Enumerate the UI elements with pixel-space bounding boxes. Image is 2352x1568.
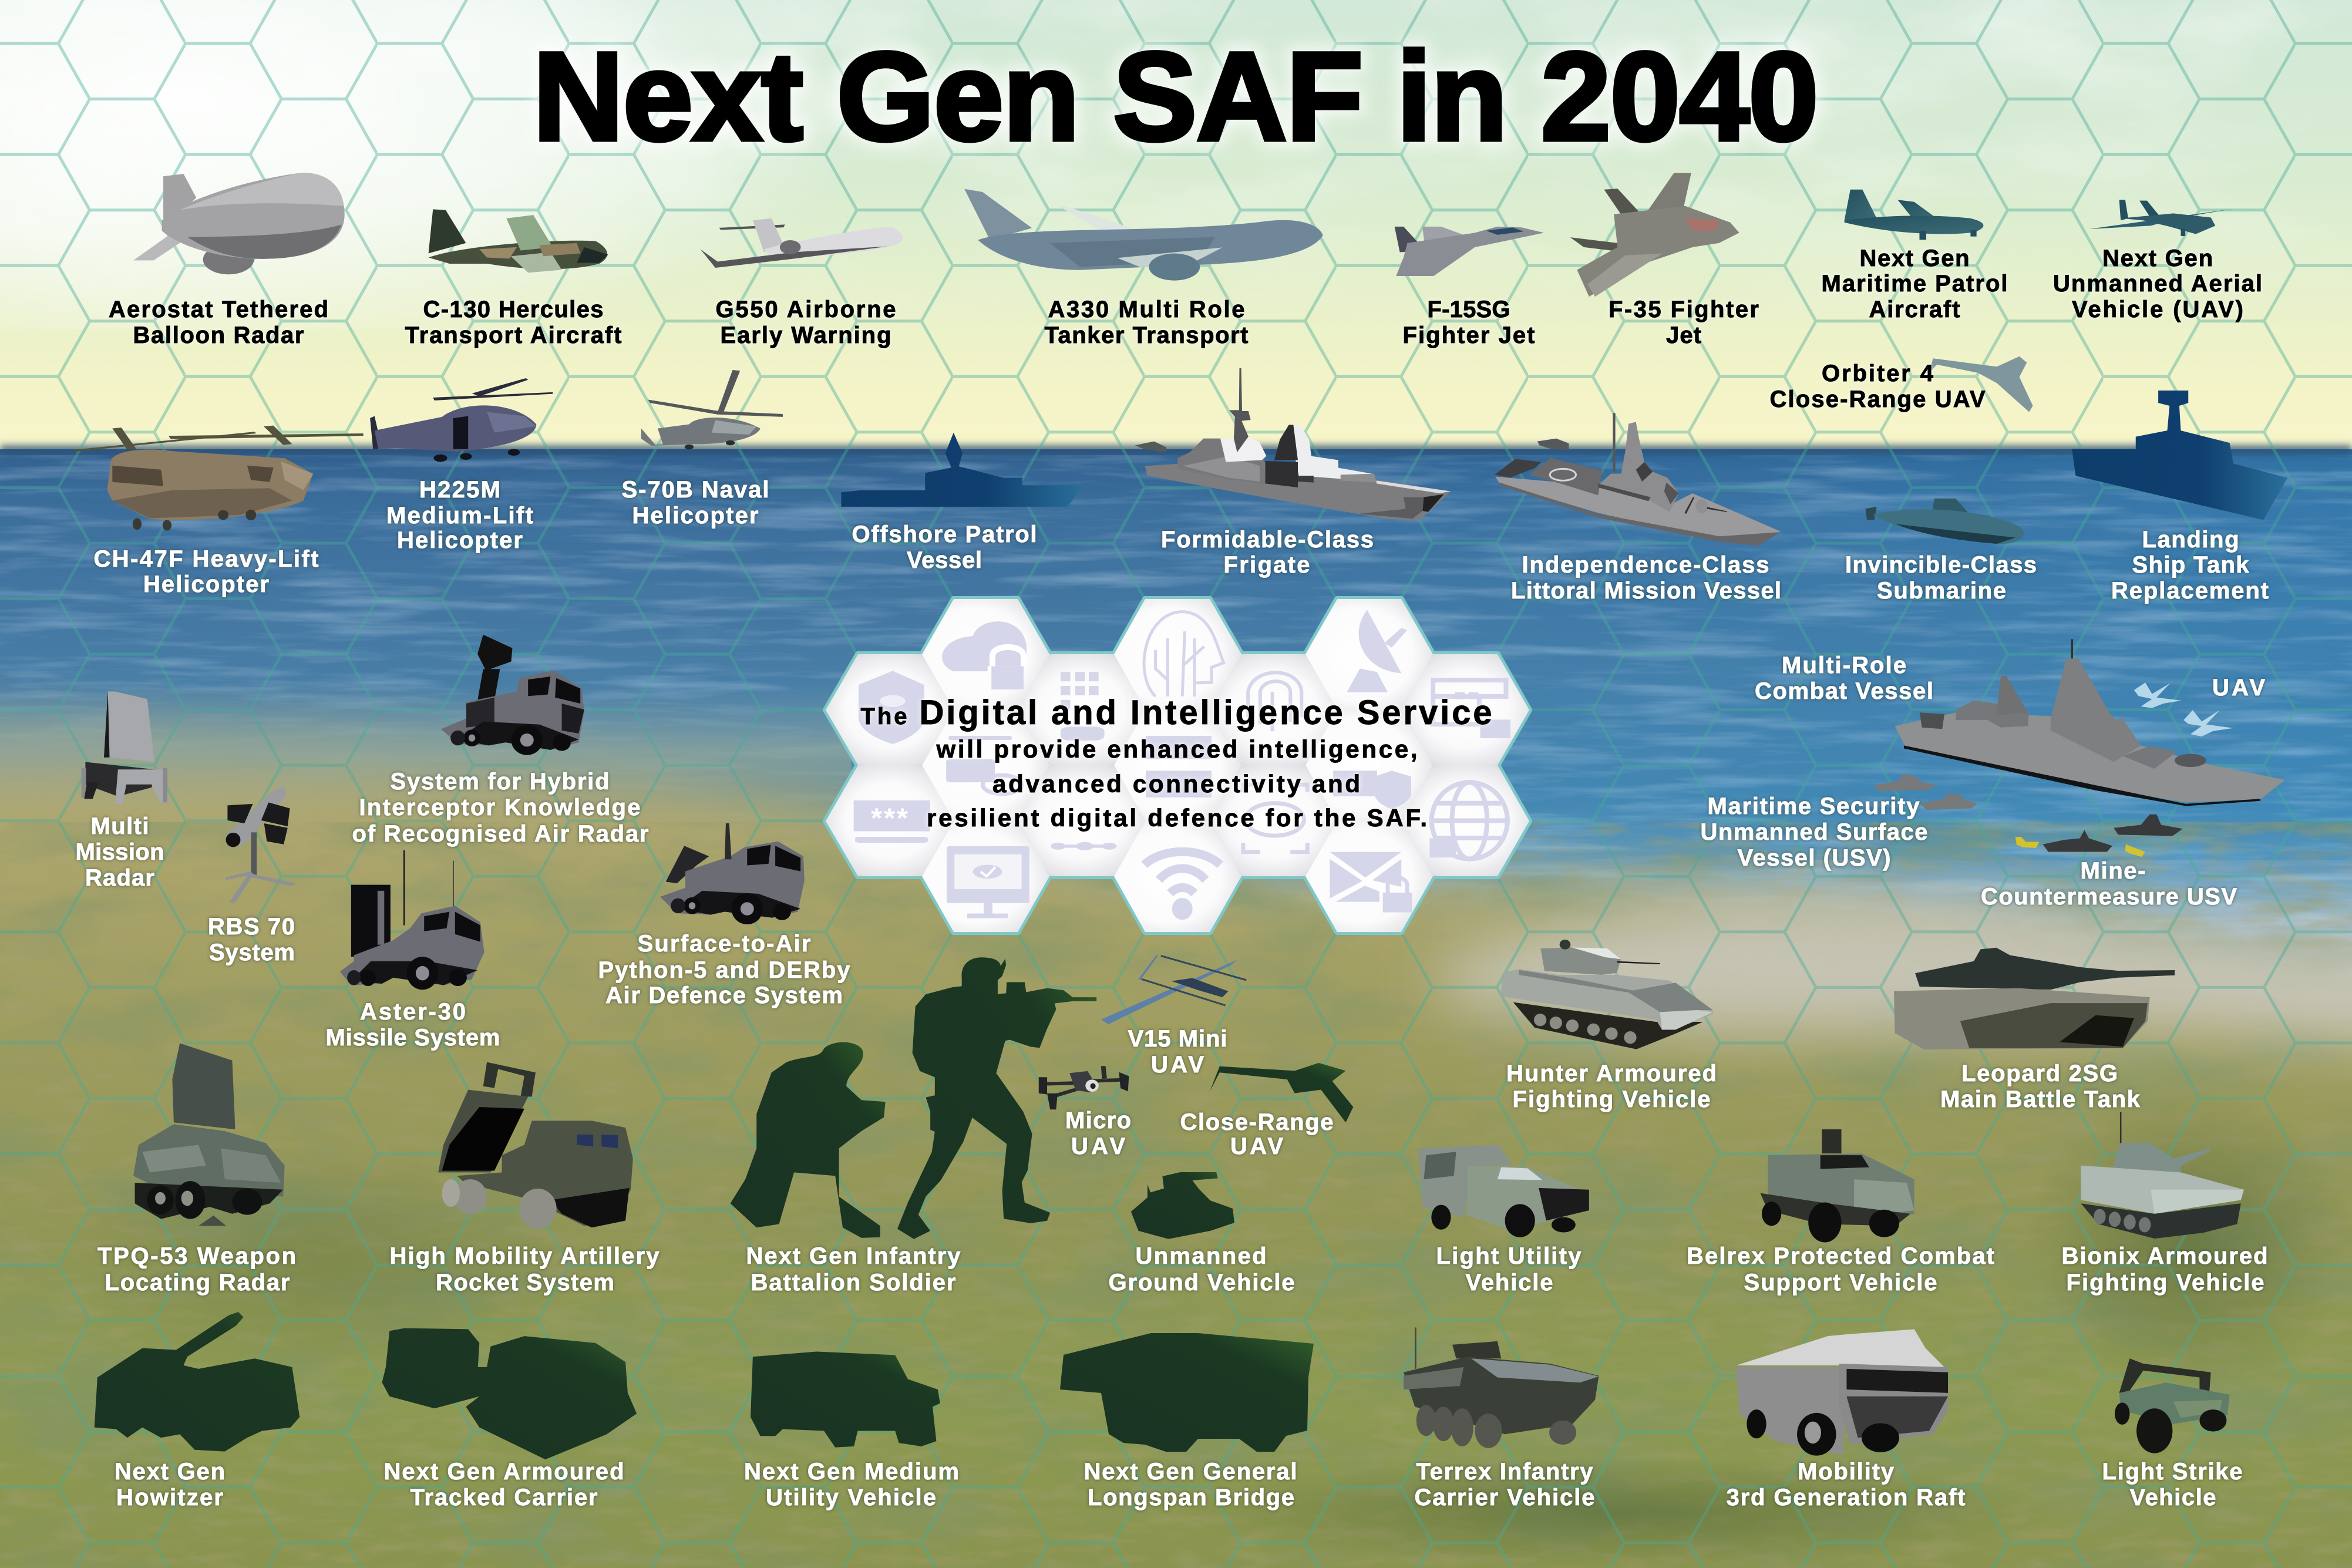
icon: launcher truck bbox=[660, 823, 805, 924]
item: Offshore Patrol Vessel bbox=[841, 433, 1084, 573]
item: Multi-Role Combat Vessel bbox=[1755, 639, 2285, 806]
icon: submarine bbox=[1865, 499, 2024, 544]
label: Landing bbox=[2142, 527, 2239, 553]
label: Vehicle bbox=[1466, 1270, 1553, 1296]
label: Air Defence System bbox=[605, 982, 843, 1008]
item: Multi Mission Radar bbox=[75, 692, 169, 891]
item: CH-47F Heavy-Lift Helicopter bbox=[73, 426, 364, 597]
item: aerostat tethered balloon radar bbox=[109, 173, 345, 348]
icon: password field bbox=[854, 800, 930, 843]
label: Countermeasure USV bbox=[1981, 884, 2237, 910]
icon: howitzer silhouette bbox=[95, 1312, 300, 1452]
icon: H225M bbox=[370, 378, 553, 462]
title: Next Gen SAF in 2040 bbox=[533, 26, 1818, 167]
label: of Recognised Air Radar bbox=[352, 821, 648, 847]
label: Utility Vehicle bbox=[766, 1485, 936, 1510]
label: Close-Range UAV bbox=[1770, 386, 1986, 412]
label bbox=[1687, 1243, 1994, 1296]
icon: keypad and magnifier bbox=[946, 736, 1022, 794]
icon: TPQ-53 radar bbox=[133, 1043, 285, 1226]
label: Offshore Patrol bbox=[852, 521, 1037, 547]
item: Next Gen Maritime Patrol Aircraft bbox=[1822, 190, 2007, 322]
label bbox=[386, 477, 533, 553]
label: Fighting Vehicle bbox=[1513, 1086, 1710, 1112]
icon: combat vessel bbox=[1895, 639, 2285, 806]
label: Transport Aircraft bbox=[405, 322, 621, 348]
title: Next Gen SAF in 2040 bbox=[533, 26, 1818, 167]
panel text: resilient digital defence for the SAF. bbox=[927, 804, 1427, 832]
icon: shield with lock bbox=[859, 671, 924, 744]
label: RBS 70 bbox=[208, 914, 295, 940]
label: Close-Range bbox=[1180, 1109, 1333, 1135]
item: S-70B Naval Helicopter bbox=[621, 370, 783, 529]
item: Mobility 3rd Generation Raft bbox=[1727, 1329, 1965, 1510]
label bbox=[325, 999, 500, 1051]
label: Light Utility bbox=[1436, 1243, 1582, 1269]
panel text: Digital and Intelligence Service bbox=[920, 694, 1492, 732]
icon: UGV silhouette bbox=[1131, 1172, 1234, 1239]
label bbox=[746, 1243, 961, 1296]
label: Submarine bbox=[1877, 578, 2006, 604]
icon: C-130 bbox=[429, 209, 608, 272]
icon: eye scan bbox=[1243, 785, 1307, 852]
item: Unmanned Ground Vehicle bbox=[1109, 1172, 1294, 1296]
hexagon icons bbox=[854, 610, 1510, 918]
label: UAV bbox=[1151, 1052, 1204, 1078]
item: Micro UAV bbox=[1039, 1066, 1131, 1159]
label: Frigate bbox=[1224, 552, 1310, 578]
item: Leopard 2SG Main Battle Tank bbox=[1894, 948, 2175, 1112]
icon: server and gears bbox=[1146, 736, 1212, 798]
label bbox=[1436, 1243, 1582, 1296]
label bbox=[744, 1459, 959, 1510]
label bbox=[109, 297, 328, 348]
label: A330 Multi Role bbox=[1048, 297, 1245, 322]
icon: frigate bbox=[1135, 368, 1451, 521]
label: Light Strike bbox=[2102, 1459, 2242, 1485]
label: Missile System bbox=[325, 1025, 500, 1051]
icon: kneeling soldier bbox=[731, 1042, 886, 1238]
label: Unmanned Aerial bbox=[2053, 271, 2262, 297]
icon: Orbiter 4 bbox=[1929, 356, 2033, 412]
label bbox=[852, 521, 1037, 573]
label: Mission bbox=[75, 839, 164, 865]
item: C-130 Hercules bbox=[405, 209, 621, 348]
label: Python-5 and DERby bbox=[598, 957, 850, 983]
label: Mobility bbox=[1798, 1459, 1895, 1485]
label: Unmanned Surface bbox=[1701, 819, 1927, 845]
label bbox=[2053, 245, 2262, 322]
icon: standing soldier bbox=[897, 957, 1096, 1239]
label: Radar bbox=[85, 865, 154, 891]
label: Terrex Infantry bbox=[1416, 1459, 1593, 1485]
icon: circuit brain head bbox=[1144, 612, 1224, 696]
label: Ground Vehicle bbox=[1109, 1270, 1294, 1296]
icon: soldier silhouettes bbox=[731, 957, 1096, 1239]
item: Landing Ship Tank Replacement bbox=[2072, 391, 2287, 604]
item: RBS 70 System bbox=[208, 786, 295, 965]
icon: cloud with lock bbox=[942, 621, 1027, 689]
icon: radar truck bbox=[441, 635, 584, 755]
icon: aerostat bbox=[133, 173, 345, 274]
label: TPQ-53 Weapon bbox=[97, 1243, 296, 1269]
icon: maritime USVs bbox=[1873, 774, 1977, 810]
label: UAV bbox=[1230, 1133, 1283, 1159]
item: F-35 fighter jet bbox=[1570, 173, 1759, 348]
icon: G550 bbox=[701, 218, 903, 268]
label: Aerostat Tethered bbox=[109, 297, 328, 322]
label: Aster-30 bbox=[360, 999, 466, 1025]
label bbox=[1084, 1459, 1297, 1510]
label: Longspan Bridge bbox=[1088, 1485, 1294, 1510]
item: SHIKRA air radar truck bbox=[352, 635, 648, 847]
icon: F-15SG bbox=[1395, 227, 1544, 276]
icon: Terrex bbox=[1404, 1327, 1599, 1448]
icon: satellite dish bbox=[1347, 610, 1407, 692]
label: Interceptor Knowledge bbox=[359, 795, 640, 820]
icon: multi mission radar bbox=[82, 692, 169, 804]
label: Invincible-Class bbox=[1845, 552, 2037, 578]
label: Bionix Armoured bbox=[2061, 1243, 2268, 1269]
panel text: advanced connectivity and bbox=[992, 770, 1360, 798]
label bbox=[97, 1243, 296, 1296]
label: G550 Airborne bbox=[715, 297, 896, 322]
label bbox=[390, 1243, 659, 1296]
panel text: The bbox=[861, 704, 907, 729]
label: Mine- bbox=[2080, 858, 2146, 884]
label: Aircraft bbox=[1869, 297, 1960, 322]
item: Orbiter 4 Close-Range UAV bbox=[1770, 356, 2033, 412]
label bbox=[1161, 527, 1374, 578]
label bbox=[1109, 1243, 1294, 1296]
label bbox=[1755, 652, 1933, 704]
label: Fighting Vehicle bbox=[2066, 1270, 2264, 1296]
panel: Digital and Intelligence Service hexagon cluster bbox=[826, 599, 1529, 932]
label: Battalion Soldier bbox=[751, 1270, 956, 1296]
label: Tracked Carrier bbox=[410, 1485, 598, 1510]
icon: A330 bbox=[964, 189, 1323, 281]
label: Next Gen bbox=[115, 1459, 225, 1485]
icon: Bionix bbox=[2081, 1112, 2244, 1239]
label: Next Gen Armoured bbox=[384, 1459, 624, 1485]
label: Early Warning bbox=[720, 322, 891, 348]
label bbox=[1770, 361, 1986, 412]
label: Medium-Lift bbox=[386, 503, 533, 529]
label: Next Gen bbox=[1859, 245, 1970, 271]
icon: keypad with hand bbox=[1061, 672, 1105, 741]
item: High Mobility Artillery Rocket System bbox=[390, 1062, 659, 1296]
label: Unmanned bbox=[1136, 1243, 1266, 1269]
label: H225M bbox=[419, 477, 500, 503]
label bbox=[75, 813, 164, 891]
label bbox=[1822, 245, 2007, 322]
item: Next Gen UAV bbox=[2053, 200, 2262, 322]
item: Next Gen Medium Utility Vehicle bbox=[744, 1351, 959, 1510]
label: Helicopter bbox=[397, 527, 523, 553]
icon: light strike vehicle bbox=[2115, 1358, 2230, 1453]
label: Independence-Class bbox=[1522, 552, 1769, 578]
item: Invincible-Class Submarine bbox=[1845, 499, 2037, 604]
icon: unmanned aerial vehicle bbox=[2089, 200, 2233, 236]
icon: Hunter AFV bbox=[1502, 940, 1713, 1049]
label: Next Gen General bbox=[1084, 1459, 1297, 1485]
item: G550 Airborne Early Warning bbox=[701, 218, 903, 348]
label: Ship Tank bbox=[2132, 552, 2249, 578]
label bbox=[1414, 1459, 1595, 1510]
label bbox=[1609, 297, 1759, 348]
item: Light Utility Vehicle bbox=[1419, 1145, 1589, 1296]
hexagon panel background bbox=[826, 599, 1529, 932]
item: Python-5 and DERby launcher bbox=[598, 823, 850, 1008]
icon: password field: *** bbox=[871, 803, 910, 834]
item: Next Gen Howitzer bbox=[95, 1312, 300, 1510]
label: C-130 Hercules bbox=[423, 297, 604, 322]
item: UAV pair bbox=[2134, 675, 2265, 736]
icon: light utility vehicle bbox=[1419, 1145, 1589, 1237]
label: F-15SG bbox=[1427, 297, 1510, 322]
label: Micro bbox=[1065, 1108, 1131, 1133]
label bbox=[405, 297, 621, 348]
panel text: will provide enhanced intelligence, bbox=[936, 735, 1418, 763]
label: Combat Vessel bbox=[1755, 678, 1933, 704]
icon: utility vehicle silhouette bbox=[751, 1351, 940, 1448]
icon: globe with lock bbox=[1432, 782, 1508, 859]
label bbox=[1981, 858, 2237, 910]
label: System for Hybrid bbox=[390, 769, 610, 795]
label: Belrex Protected Combat bbox=[1687, 1243, 1994, 1269]
label: Support Vehicle bbox=[1744, 1270, 1937, 1296]
label: Tanker Transport bbox=[1044, 322, 1249, 348]
icon: monitor with shield bbox=[1333, 770, 1411, 809]
icon: browser window with lock bbox=[1433, 680, 1510, 738]
label bbox=[1180, 1109, 1333, 1159]
panel text bbox=[861, 694, 1492, 832]
label: Multi-Role bbox=[1782, 652, 1906, 678]
icon: RBS 70 launcher bbox=[225, 786, 295, 903]
item: Belrex Protected Combat Support Vehicle bbox=[1687, 1129, 1994, 1296]
label: High Mobility Artillery bbox=[390, 1243, 659, 1269]
item: Formidable-Class Frigate bbox=[1135, 368, 1451, 578]
label: Vessel (USV) bbox=[1737, 845, 1891, 871]
label: UAV bbox=[2212, 675, 2265, 701]
icon: maritime patrol aircraft bbox=[1845, 190, 1983, 240]
label bbox=[1701, 793, 1927, 871]
label bbox=[1128, 1026, 1227, 1078]
icon: monitor with check bbox=[947, 846, 1029, 918]
label: Next Gen bbox=[2102, 245, 2213, 271]
label: Next Gen Medium bbox=[744, 1459, 959, 1485]
item: Bionix Armoured Fighting Vehicle bbox=[2061, 1112, 2268, 1296]
item: Next Gen Infantry Battalion Soldier bbox=[731, 957, 1096, 1296]
label: Next Gen Infantry bbox=[746, 1243, 961, 1269]
label: Helicopter bbox=[632, 503, 759, 529]
label: Howitzer bbox=[116, 1485, 223, 1510]
label bbox=[1511, 552, 1781, 604]
label: Maritime Security bbox=[1708, 793, 1920, 819]
icon: quadcopter bbox=[1039, 1066, 1129, 1109]
item: Next Gen Armoured Tracked Carrier bbox=[382, 1328, 637, 1510]
label: Jet bbox=[1666, 322, 1701, 348]
label bbox=[1402, 297, 1535, 348]
label bbox=[208, 914, 295, 965]
label: S-70B Naval bbox=[621, 477, 769, 503]
icon: patrol vessel silhouette bbox=[841, 433, 1084, 507]
label: Multi bbox=[90, 813, 149, 839]
label bbox=[598, 931, 850, 1008]
item: Light Strike Vehicle bbox=[2102, 1358, 2242, 1510]
icon: mine-countermeasure USVs bbox=[2015, 815, 2183, 857]
label: Orbiter 4 bbox=[1822, 361, 1934, 386]
icon: CH-47F bbox=[73, 426, 364, 531]
label: CH-47F Heavy-Lift bbox=[94, 546, 318, 572]
label bbox=[384, 1459, 624, 1510]
item: Close-Range UAV bbox=[1180, 1063, 1353, 1159]
label bbox=[94, 546, 318, 597]
label: Balloon Radar bbox=[133, 322, 304, 348]
icon: network nodes bbox=[1051, 842, 1116, 850]
item: Maritime Security USV bbox=[1701, 774, 1977, 871]
icon: S-70B bbox=[641, 370, 783, 449]
label: Fighter Jet bbox=[1402, 322, 1535, 348]
label: Littoral Mission Vessel bbox=[1511, 578, 1781, 604]
icon: bridge vehicle silhouette bbox=[1060, 1333, 1314, 1452]
icon: F-35 bbox=[1570, 173, 1739, 297]
label: Hunter Armoured bbox=[1506, 1061, 1717, 1086]
icon: two UAVs bbox=[2134, 682, 2233, 736]
icon: Aster-30 truck bbox=[340, 850, 484, 990]
label bbox=[1940, 1061, 2141, 1112]
icon: envelope with lock bbox=[1330, 852, 1412, 913]
icon: fingerprint bbox=[1248, 672, 1301, 731]
label bbox=[1506, 1061, 1717, 1112]
label: F-35 Fighter bbox=[1609, 297, 1759, 322]
item: Hunter Armoured Fighting Vehicle bbox=[1502, 940, 1717, 1112]
item: Terrex Infantry Carrier Vehicle bbox=[1404, 1327, 1599, 1510]
label: System bbox=[209, 940, 295, 965]
icon: close-range UAV silhouette bbox=[1210, 1063, 1353, 1122]
item: A330 Multi Role Tanker Transport bbox=[964, 189, 1323, 348]
item: F-15SG bbox=[1395, 227, 1544, 348]
label: Rocket System bbox=[436, 1270, 614, 1296]
item: H225M Medium-Lift Helicopter bbox=[370, 378, 553, 553]
label bbox=[115, 1459, 225, 1510]
label: Locating Radar bbox=[105, 1270, 290, 1296]
label: Vessel bbox=[907, 547, 982, 573]
item: Independence-Class Littoral Mission Vessel bbox=[1495, 413, 1781, 604]
label bbox=[621, 477, 769, 529]
label bbox=[352, 769, 648, 847]
label: Surface-to-Air bbox=[638, 931, 810, 957]
label: Vehicle bbox=[2129, 1485, 2216, 1510]
label: Maritime Patrol bbox=[1822, 271, 2007, 297]
icon: Belrex bbox=[1760, 1129, 1914, 1243]
icon: mini UAV bbox=[1101, 955, 1246, 1024]
label: Leopard 2SG bbox=[1961, 1061, 2118, 1086]
label bbox=[2102, 1459, 2242, 1510]
label: 3rd Generation Raft bbox=[1727, 1485, 1965, 1510]
icon: landing ship silhouette bbox=[2072, 391, 2287, 520]
icon: wifi bbox=[1145, 852, 1220, 916]
item: Mine-Countermeasure USV bbox=[1981, 815, 2237, 910]
label bbox=[2111, 527, 2269, 604]
label: Carrier Vehicle bbox=[1414, 1485, 1595, 1510]
label bbox=[1727, 1459, 1965, 1510]
label: UAV bbox=[1071, 1133, 1125, 1159]
item: Next Gen General Longspan Bridge bbox=[1060, 1333, 1314, 1510]
label: Formidable-Class bbox=[1161, 527, 1374, 553]
icon: raft vehicle bbox=[1736, 1329, 1948, 1456]
label bbox=[1845, 552, 2037, 604]
label bbox=[1065, 1108, 1131, 1159]
label bbox=[1044, 297, 1249, 348]
icon: littoral mission vessel bbox=[1495, 413, 1781, 546]
label: Replacement bbox=[2111, 578, 2269, 604]
item: V15 Mini UAV bbox=[1101, 955, 1246, 1078]
item: TPQ-53 Weapon Locating Radar bbox=[97, 1043, 296, 1296]
icon: tracked carrier silhouette bbox=[382, 1328, 637, 1459]
label: V15 Mini bbox=[1128, 1026, 1227, 1052]
label: Vehicle (UAV) bbox=[2072, 297, 2243, 322]
icon: HIMARS bbox=[438, 1062, 633, 1229]
label: Main Battle Tank bbox=[1940, 1086, 2141, 1112]
label bbox=[2061, 1243, 2268, 1296]
icon: Leopard 2SG bbox=[1894, 948, 2175, 1049]
item: Aster-30 Missile System bbox=[325, 850, 500, 1051]
label: Helicopter bbox=[143, 571, 269, 597]
label bbox=[715, 297, 896, 348]
